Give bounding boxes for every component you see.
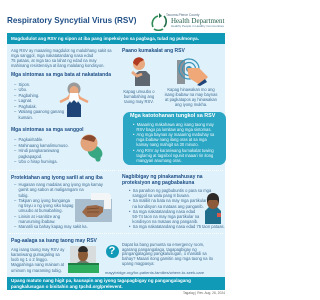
list: vaccination: • Sa maliliit na bata na may mga partikular <box>129 198 207 203</box>
divider <box>9 233 223 234</box>
heading: symptoms in infants: Mga sintomas sa mga sanggol <box>11 127 84 133</box>
list: protection <box>14 182 103 229</box>
text: caring: loob ng 1 o 2 linggo. <box>11 257 48 262</box>
caption: touching surface <box>164 86 218 107</box>
intro text: mahinang resistensiya at ilang malalang kondisyon. <box>11 62 105 68</box>
caption: coughing: bumabahing ang <box>124 94 154 98</box>
text: caring <box>11 246 64 273</box>
text: when to seek care <box>122 242 213 266</box>
list: symptoms in infants: – Hindi pangkaraniwang <box>14 148 59 153</box>
heading: caring for a person with RSV: Pag-aalaga sa isang taong may RSV <box>11 238 97 244</box>
revision note: Tagalog | Rev. Aug. 26, 2024 <box>183 290 225 294</box>
list: symptoms in children and adults: – Lagnat. <box>14 98 32 103</box>
icon: vaccinated person <box>205 193 221 224</box>
list: symptoms in infants: – Ubo o hirap huminga. <box>14 159 58 164</box>
list: vaccination: na kondisyon sa mataas ang panganib. <box>132 204 204 209</box>
list: vaccination <box>129 188 225 229</box>
caption: touching surface: isang ibabaw na may baynas <box>165 92 217 96</box>
text: caring: karaniwang gumagaling sa <box>11 252 60 257</box>
heading: how it spreads: Paano kumakalat ang RSV <box>122 48 185 54</box>
text: when to seek care: pangangalagang pangkalusugan, o manatili sa <box>122 251 207 256</box>
list: vaccination: • Sa mga nakatatandang nasa edad <box>129 209 195 214</box>
list: facts: • Ang mga baynas ay maaaring mabuhay sa <box>133 132 214 137</box>
panel: facts about RSV <box>123 112 226 165</box>
top banner <box>7 33 225 44</box>
text: when to seek care: bahay? Maaari itong gamitin ang mga taong na ito <box>122 256 213 261</box>
list: symptoms in infants: – Mahinaang kamalimumuso. <box>14 143 69 148</box>
list: symptoms in infants <box>14 137 69 164</box>
list: symptoms in children and adults: – Walang gaanong ganang <box>14 109 64 114</box>
intro text: 75 pataas, at mga tao sa lahat ng edad na may <box>11 58 97 62</box>
heading: vaccination: Nagbibigay ng pinakamahusay na <box>122 174 203 180</box>
list: symptoms in infants: pagkapagod. <box>19 154 42 159</box>
bottom banner <box>7 277 225 290</box>
icon: question mark: ? <box>109 244 115 256</box>
list: protection: maruruming ibabaw. <box>19 219 55 224</box>
list: symptoms in infants: – Pagkairitable. <box>14 137 43 142</box>
list: facts: • Ang RSV ay karaniwang kumakalat tuwing <box>133 148 214 153</box>
list: facts: RSV bago pa lumitaw ang mga sintomas. <box>136 127 212 132</box>
icon: hand touching button <box>177 58 208 86</box>
icon: person coughing <box>131 57 150 86</box>
list: symptoms in children and adults: – Ubo. <box>14 87 27 92</box>
list: symptoms in children and adults: kumain. <box>19 115 33 120</box>
list: protection: tubig. <box>19 193 29 198</box>
caption: coughing: Kapag umuubo o <box>123 88 155 94</box>
list: symptoms in children and adults: – Pagbahing. <box>14 93 39 98</box>
intro text <box>11 48 112 68</box>
list: symptoms in children and adults <box>14 82 64 120</box>
heading: vaccination <box>122 174 203 186</box>
heading: protect yourself and others: Protektahan ang iyong sarili at ang iba <box>11 175 103 181</box>
bottom banner: Upang matuto nang higit pa, kausapin ang iyong tagapagbigay ng pangangalagang <box>11 278 191 283</box>
list: protection: – Linisin at i-sanitize ang <box>14 214 60 219</box>
icon: person in bed <box>68 246 99 273</box>
list: facts: kamay nang mahigit sa 30 minuto. <box>136 142 199 147</box>
list: protection: – Hugasan nang madalas ang iyong mga kamay <box>14 182 103 187</box>
list: protection: – Takpan ang iyong bunganga <box>14 198 70 203</box>
icon: washing hands <box>75 193 112 222</box>
heading: facts: Mga katotohanan tungkol sa RSV <box>130 113 215 119</box>
icon: infant <box>80 134 102 162</box>
text: when to seek care: Dapat ka bang pumunta sa emergency room, <box>122 242 204 247</box>
title: Respiratory Syncytial Virus (RSV) <box>7 16 136 25</box>
list: vaccination: • Sa panahon ng pagbubuntis o para sa mga <box>129 188 211 193</box>
link: where to seek care: mayybridge.org/for-patients-families/where-to-seek-care <box>105 270 204 274</box>
list: vaccination: kondisyon na mataas ang panganib. <box>132 219 198 224</box>
caption: coughing <box>123 88 155 104</box>
logo: health department: Healthy People in Healthy Communities <box>171 24 224 28</box>
logo: health department: Tacoma-Pierce County <box>166 13 199 17</box>
background panel <box>7 33 225 278</box>
caption: coughing: taong may RSV. <box>124 98 154 104</box>
caption: touching surface: at pagkatapos ay hinawakan <box>165 96 217 102</box>
list: vaccination: • Sa mga nakatatandang nasa edad 75 taon pataas. <box>129 224 225 229</box>
list: facts: taglamig at tagsibol ngunit maaari rin itong <box>136 153 213 158</box>
list: protection: umuubo at bumabahing. <box>19 208 63 213</box>
list: protection: – Manatili sa bahay kapag may sakit ka. <box>14 224 88 229</box>
list: facts: • Maaaring makahawa ang isang taong may <box>133 122 214 126</box>
heading: symptoms in children and adults: Mga sintomas sa mga bata at nakatatanda <box>11 72 111 78</box>
list: facts: mangyari anumang oras. <box>136 158 182 163</box>
caption: touching surface: Kapag hinawakan mo ang <box>167 86 215 92</box>
list: protection: ng tisyu o ng iyong siko kapag <box>19 203 73 208</box>
logo: health department: Health Department <box>171 16 224 24</box>
list: vaccination: sanggol na wala pang 8 buwan. <box>132 193 190 198</box>
heading: vaccination: proteksiyon ang pagbabakuna <box>122 180 194 186</box>
text: when to seek care: agarang pangangalaga, tagapagbigay ng <box>122 247 197 252</box>
intro text: mga sanggol, mga nakatatandang nasa edad <box>11 52 93 58</box>
list: protection: gamit ang sabon at maligamgam na <box>19 187 84 192</box>
text: caring: Magpahinga nang mainam at <box>11 262 64 267</box>
list: vaccination: 50-74 taon na may mga partikular na <box>132 214 199 219</box>
text: caring: Ang isang taong may RSV ay <box>11 246 64 252</box>
list: facts: mga ibabaw nang ilang oras at sa mga <box>136 137 207 142</box>
divider <box>118 170 223 171</box>
text: when to seek care: upang magpasya: <box>122 261 155 266</box>
intro text: Ang RSV ay maaaring magdulot ng malubhang sakit sa <box>11 48 112 52</box>
list: symptoms in children and adults: – Sipon. <box>14 82 30 86</box>
list: facts <box>133 122 214 163</box>
list: symptoms in children and adults: – Paghalak. <box>14 104 37 109</box>
caption: touching surface: ang iyong mukha. <box>175 102 207 106</box>
top banner: Magdudulot ang RSV ng sipon at iba pang impeksiyon sa pagbaga, tulad ng pulmonya. <box>11 36 199 40</box>
logo: health department <box>151 13 224 31</box>
icon: question mark <box>106 244 118 258</box>
text: caring: uminom ng maraming tubig. <box>11 268 62 273</box>
icon: person sneezing <box>60 82 88 117</box>
bottom banner: pangkalusugan o bisitahin ang tpchd.org/prelevent. <box>11 284 123 288</box>
divider <box>9 170 115 171</box>
